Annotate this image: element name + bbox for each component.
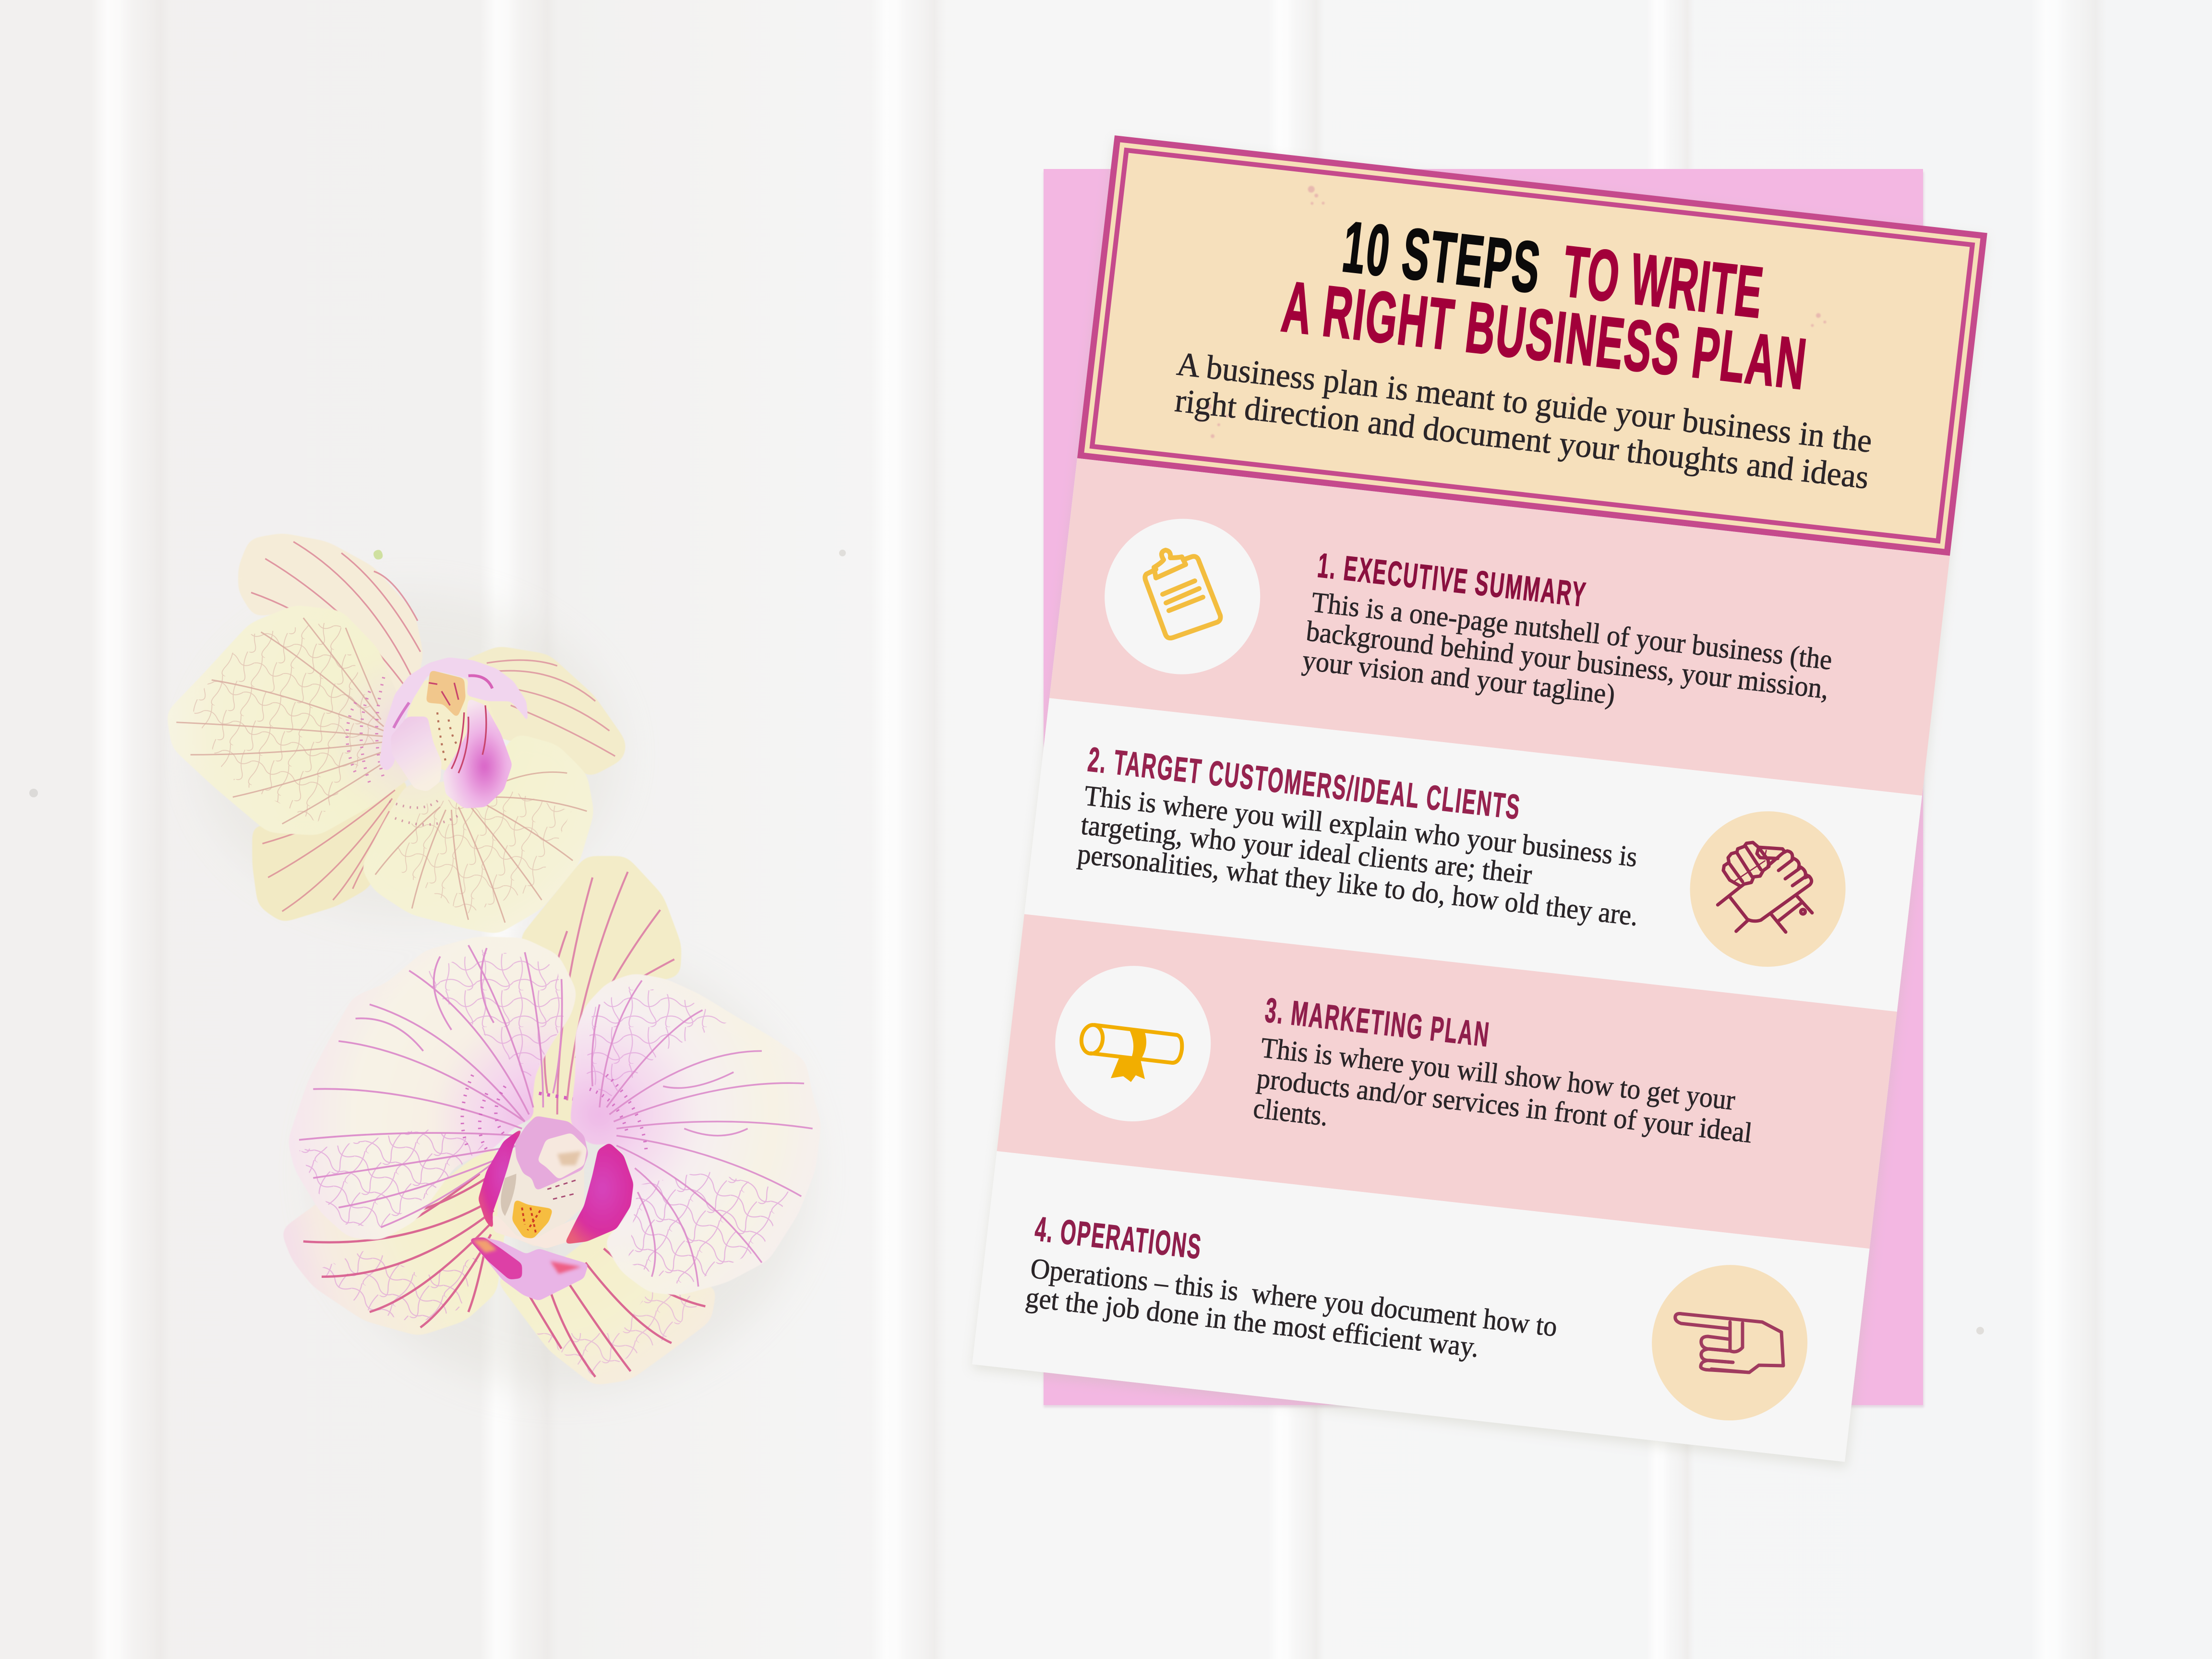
step 3 text: clients. [1252, 1092, 1330, 1132]
step 3 text [1252, 1032, 1757, 1179]
lower orchid flower [281, 856, 821, 1385]
lower flower: left petal [288, 937, 577, 1240]
step bands base [972, 135, 1987, 1462]
step 1 text: your vision and your tagline) [1301, 644, 1617, 710]
lower flower: lip and column [469, 1116, 634, 1301]
panel: step 1 executive summary [1049, 458, 1950, 796]
icon: handshake [1718, 842, 1812, 932]
step 1 text [1301, 586, 1834, 734]
step 2 text: targeting, who your ideal clients are; their [1079, 808, 1534, 890]
panel: step 4 operations [972, 1151, 1870, 1462]
lower flower: lower-right sepal [494, 1220, 717, 1385]
step 3 heading: 3. MARKETING PLAN [1263, 991, 1491, 1054]
step 3 text: This is where you will show how to get your [1259, 1032, 1737, 1116]
lower flower: right petal [570, 974, 821, 1295]
step 1 text: This is a one-page nutshell of your business (the [1310, 586, 1834, 676]
upper flower: lower-right petal [361, 733, 594, 934]
infographic flyer [972, 135, 1987, 1462]
header intro: right direction and document your thoughts and ideas [1173, 382, 1871, 496]
panel: header [1077, 135, 1987, 556]
lower flower: lower-left sepal [281, 1142, 511, 1336]
icon: diploma scroll [1080, 1023, 1182, 1082]
flower shadow [197, 592, 811, 1390]
upper flower: right sepal [458, 646, 626, 777]
step 3 text: products and/or services in front of your ideal [1255, 1062, 1754, 1149]
step 1 heading: 1. EXECUTIVE SUMMARY [1316, 546, 1587, 614]
header intro: A business plan is meant to guide your business in the [1175, 346, 1874, 460]
step 1 text: background behind your business, your mission, [1305, 615, 1830, 705]
title line 1: 10 STEPS [1339, 206, 1544, 308]
title line 2: A RIGHT BUSINESS PLAN [1278, 266, 1810, 404]
upper flower: top sepal [239, 533, 423, 705]
step 2 icon disc [1682, 803, 1854, 975]
step 4 heading: 4. OPERATIONS [1033, 1210, 1203, 1266]
step 2 text: personalities, what they like to do, how old they are. [1076, 838, 1640, 932]
upper flower: lip and column [380, 657, 529, 808]
panel: step 2 target customers [1024, 698, 1922, 1012]
step 2 text [1076, 780, 1647, 932]
step 4 text: get the job done in the most efficient way. [1024, 1281, 1481, 1363]
icon: clipboard [1145, 550, 1220, 638]
step 4 text: Operations – this is where you document how to [1029, 1252, 1559, 1343]
step 2 text: This is where you will explain who your business is [1082, 780, 1639, 873]
icon: pointing hand [1675, 1314, 1783, 1372]
panel: step 3 marketing plan [997, 914, 1897, 1249]
pink backing sheet [1044, 169, 1924, 1407]
step 2 heading: 2. TARGET CUSTOMERS/IDEAL CLIENTS [1086, 741, 1522, 827]
panel: header: TO WRITE [1559, 231, 1767, 333]
upper orchid flower [167, 533, 626, 934]
step 3 icon disc [1047, 958, 1219, 1130]
step 4 icon disc [1644, 1257, 1816, 1429]
step 1 icon disc [1096, 511, 1269, 683]
upper flower: left petal [167, 605, 416, 835]
upper flower: lower-left sepal [252, 776, 409, 923]
lower flower: top sepal [519, 856, 681, 1129]
header stains [1196, 176, 1835, 505]
orchid flowers [167, 533, 821, 1390]
paper shadow [972, 139, 1986, 1468]
